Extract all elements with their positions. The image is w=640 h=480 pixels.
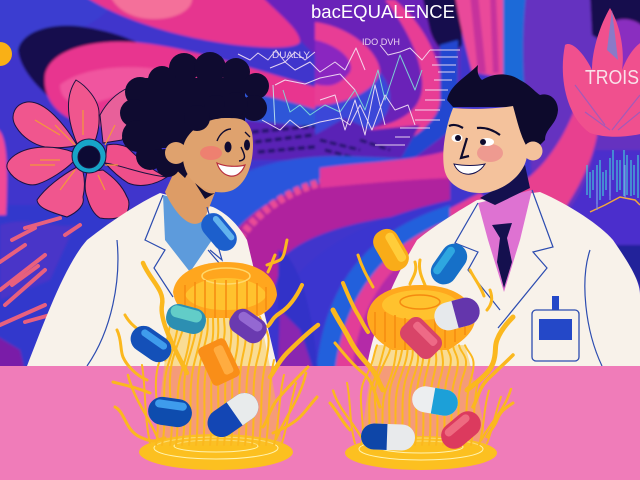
left puddle — [139, 434, 293, 470]
pill: blue and white — [202, 387, 264, 443]
pill: yellow — [369, 224, 413, 276]
woman eyes — [224, 140, 250, 152]
hair fringe — [184, 92, 248, 131]
man smile — [454, 164, 485, 174]
man neck — [480, 165, 530, 205]
woman smile — [217, 163, 245, 176]
man hair — [447, 65, 558, 148]
left jelly and splash — [113, 208, 318, 470]
man eyes — [452, 134, 494, 146]
woman cheek — [200, 146, 222, 160]
pill: white and cyan — [410, 384, 460, 418]
chart lines — [238, 37, 460, 145]
left strands — [128, 317, 306, 445]
man scientist — [367, 65, 640, 366]
pill: blue and white lower — [361, 423, 415, 451]
pill: blue left — [126, 321, 176, 367]
man coat — [367, 192, 640, 366]
small spectrum chart — [587, 150, 640, 212]
woman shirt — [163, 195, 212, 272]
background swirls — [0, 0, 640, 372]
lower left — [0, 205, 120, 370]
sun circle — [0, 42, 12, 66]
pill: white and purple — [431, 295, 483, 333]
flower — [7, 80, 167, 219]
man ear — [524, 142, 542, 160]
chart lines: DUALLY — [272, 50, 310, 60]
flower centre — [72, 139, 106, 173]
badge pocket — [532, 296, 579, 361]
right stripes — [455, 0, 506, 78]
coat lapels — [455, 190, 553, 328]
chart swirl block — [315, 0, 460, 160]
right puddle — [345, 436, 497, 470]
pill: orange — [197, 337, 241, 387]
woman coat — [27, 193, 277, 366]
pill: red upper — [396, 313, 446, 363]
man brows and nose — [449, 125, 500, 158]
right strands — [333, 345, 511, 445]
coat lapels — [145, 195, 238, 297]
woman brows and nose — [217, 129, 250, 161]
chart lines: IDO DVH — [362, 37, 400, 47]
title text: bacEQUALENCE — [311, 2, 455, 22]
woman face — [183, 118, 253, 192]
jaw shadow — [195, 183, 215, 199]
left jelly — [173, 262, 277, 318]
pill: teal — [163, 301, 209, 337]
pink plant — [563, 8, 640, 137]
left tendrils — [113, 240, 318, 441]
pill: blue right — [426, 239, 472, 289]
man cheek — [477, 144, 503, 162]
pill: purple — [225, 304, 271, 348]
right jelly and splash — [330, 224, 513, 470]
man face — [443, 106, 527, 193]
coral strokes lower left — [0, 218, 80, 325]
pill: blue top — [196, 208, 242, 256]
man shirt — [478, 190, 532, 292]
woman ear — [165, 142, 187, 164]
man tie — [492, 223, 512, 288]
pill: blue lower — [146, 395, 194, 429]
woman hair back — [120, 52, 269, 178]
lower bands — [200, 156, 450, 245]
pill: red lower — [436, 406, 486, 454]
pink table — [0, 366, 640, 480]
right jelly — [367, 285, 475, 350]
woman scientist — [27, 52, 277, 366]
woman neck — [165, 170, 218, 224]
right tendrils — [330, 255, 513, 437]
